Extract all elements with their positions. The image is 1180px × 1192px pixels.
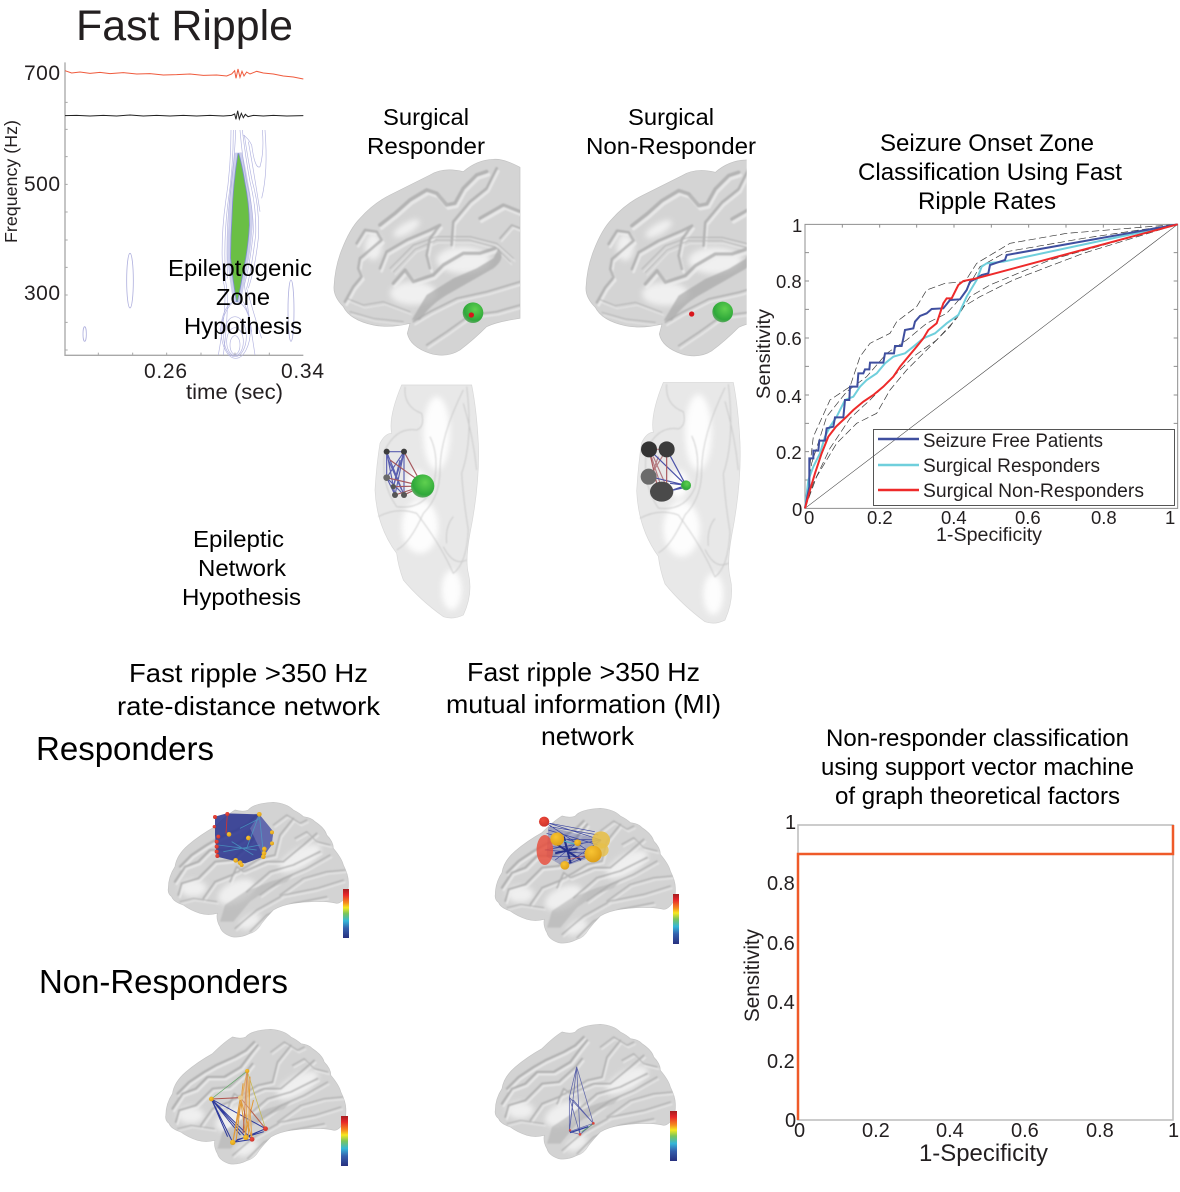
heading: rate-distance network bbox=[117, 658, 381, 721]
x tick labels bbox=[794, 1120, 1179, 1142]
label: Epileptogenic Zone Hypothesis: Zone bbox=[216, 284, 270, 310]
brain network: responders mutual information bbox=[495, 808, 675, 943]
heading: mutual information network bbox=[446, 657, 721, 751]
y tick labels: 0.2 bbox=[767, 1051, 795, 1073]
brain network: responders rate-distance bbox=[168, 802, 348, 937]
y axis title: Sensitivity bbox=[741, 929, 764, 1022]
y tick labels bbox=[767, 812, 796, 1132]
label: Epileptic Network Hypothesis: Epileptic bbox=[193, 526, 284, 552]
legend: Surgical Non-Responders bbox=[923, 481, 1144, 502]
colorbar: responders rate-distance bbox=[343, 889, 349, 938]
brain: responder lateral bbox=[334, 159, 522, 355]
y axis labels: 700 bbox=[24, 62, 60, 85]
y axis labels: 300 bbox=[24, 282, 60, 305]
x tick labels: 0 bbox=[804, 507, 814, 528]
x tick labels: 0.8 bbox=[1086, 1120, 1114, 1142]
y tick labels: 0.2 bbox=[776, 442, 802, 463]
chart: ROC SVM classification bbox=[741, 812, 1179, 1167]
x axis title: 1-Specificity bbox=[936, 524, 1042, 546]
chart: ROC seizure onset zone bbox=[753, 215, 1178, 546]
label: Epileptic Network Hypothesis bbox=[182, 526, 301, 610]
x axis labels: 0.26 bbox=[144, 360, 187, 383]
heading: Seizure Onset Zone Classification: Ripple Rates bbox=[918, 188, 1056, 215]
y tick labels: 0 bbox=[785, 1110, 796, 1132]
confidence bounds dashed bbox=[805, 224, 1178, 508]
heading: Surgical Responder bbox=[367, 104, 485, 159]
x tick labels: 0.2 bbox=[862, 1120, 890, 1142]
colorbar: non-responders rate-distance bbox=[341, 1116, 348, 1166]
isolated contour ellipses bbox=[83, 253, 294, 341]
plot frame bbox=[805, 224, 1178, 508]
legend: Seizure Free Patients bbox=[923, 431, 1103, 452]
heading: Seizure Onset Zone Classification: Classification Using Fast bbox=[858, 159, 1122, 186]
orange trace bbox=[65, 69, 303, 79]
panel: time-frequency plot bbox=[1, 62, 324, 404]
title: Fast Ripple: Fast Ripple bbox=[76, 2, 293, 50]
brain: non-responder lateral bbox=[586, 160, 747, 356]
y axis title: Frequency (Hz) bbox=[1, 120, 21, 243]
y tick labels: 0 bbox=[792, 499, 802, 520]
colorbar: responders mutual information bbox=[673, 894, 679, 944]
label: Epileptogenic Zone Hypothesis: Epileptogenic bbox=[168, 255, 312, 281]
heading: mutual information network: Fast ripple >350 Hz bbox=[467, 657, 700, 687]
black trace bbox=[65, 111, 303, 119]
y tick labels: 0.4 bbox=[776, 386, 802, 407]
x tick labels: 0.6 bbox=[1011, 1120, 1039, 1142]
y tick labels: 0.6 bbox=[767, 933, 795, 955]
row label: Responders: Responders bbox=[36, 730, 214, 767]
y axis labels bbox=[24, 62, 60, 305]
curve: surgical responders bbox=[805, 224, 1178, 508]
y tick labels: 1 bbox=[792, 215, 802, 236]
heading: Surgical Responder: Surgical bbox=[383, 104, 469, 130]
spectral blob with contours bbox=[218, 130, 266, 358]
legend bbox=[874, 430, 1174, 506]
heading: Surgical Non-Responder: Non-Responder bbox=[586, 133, 756, 159]
y tick labels: 0.6 bbox=[776, 328, 802, 349]
heading: non-responder classification: Non-responder classification bbox=[826, 725, 1129, 752]
label: Epileptic Network Hypothesis: Hypothesis bbox=[182, 584, 301, 610]
curve: surgical non-responders bbox=[805, 224, 1178, 508]
brain: responder ventral network bbox=[375, 385, 479, 618]
heading: Surgical Non-Responder: Surgical bbox=[628, 104, 714, 130]
y tick labels: 0.4 bbox=[767, 992, 795, 1014]
heading: rate-distance network: rate-distance network bbox=[117, 691, 381, 721]
heading: Seizure Onset Zone Classification: Seizure Onset Zone bbox=[880, 130, 1094, 157]
heading: Surgical Non-Responder bbox=[586, 104, 756, 159]
y tick labels: 0.8 bbox=[776, 271, 802, 292]
x axis title: time (sec) bbox=[186, 380, 283, 404]
brain: non-responder ventral network bbox=[637, 382, 740, 623]
x axis labels: 0.34 bbox=[281, 360, 324, 383]
row label: Non-Responders: Non-Responders bbox=[39, 963, 288, 1000]
x tick labels: 1 bbox=[1165, 507, 1175, 528]
x tick labels: 0.2 bbox=[867, 507, 893, 528]
x tick labels bbox=[804, 507, 1175, 528]
x tick labels: 0.6 bbox=[1015, 507, 1041, 528]
curve bbox=[798, 825, 1173, 1120]
x axis labels bbox=[144, 360, 324, 383]
heading: mutual information network: mutual information (MI) bbox=[446, 689, 721, 719]
heading: non-responder classification: using support vector machine bbox=[821, 754, 1134, 781]
heading: non-responder classification bbox=[821, 725, 1134, 810]
curve: seizure free patients bbox=[805, 224, 1178, 508]
x tick labels: 0 bbox=[794, 1120, 805, 1142]
legend: Surgical Responders bbox=[923, 456, 1100, 477]
label: Epileptogenic Zone Hypothesis bbox=[168, 255, 312, 339]
x tick labels: 1 bbox=[1168, 1120, 1179, 1142]
brain network: non-responders rate-distance bbox=[166, 1029, 346, 1164]
label: Epileptic Network Hypothesis: Network bbox=[198, 555, 287, 581]
heading: Seizure Onset Zone Classification bbox=[858, 130, 1122, 215]
axes bbox=[65, 62, 303, 355]
colorbar: non-responders mutual information bbox=[670, 1111, 677, 1161]
x tick labels: 0.4 bbox=[941, 507, 967, 528]
heading: Surgical Responder: Responder bbox=[367, 133, 485, 159]
y tick labels bbox=[776, 215, 802, 520]
y axis labels: 500 bbox=[24, 173, 60, 196]
heading: rate-distance network: Fast ripple >350 Hz bbox=[129, 658, 368, 688]
brain network: non-responders mutual information bbox=[495, 1024, 675, 1159]
y tick labels: 0.8 bbox=[767, 873, 795, 895]
label: Epileptogenic Zone Hypothesis: Hypothesis bbox=[184, 313, 302, 339]
heading: non-responder classification: of graph theoretical factors bbox=[835, 783, 1120, 810]
heading: mutual information network: network bbox=[541, 721, 635, 751]
plot frame bbox=[798, 825, 1173, 1120]
y tick labels: 1 bbox=[785, 812, 796, 834]
x axis title: 1-Specificity bbox=[919, 1140, 1048, 1167]
y axis title: Sensitivity bbox=[753, 309, 775, 399]
x tick labels: 0.4 bbox=[936, 1120, 964, 1142]
x tick labels: 0.8 bbox=[1091, 507, 1117, 528]
chance diagonal bbox=[805, 224, 1178, 508]
